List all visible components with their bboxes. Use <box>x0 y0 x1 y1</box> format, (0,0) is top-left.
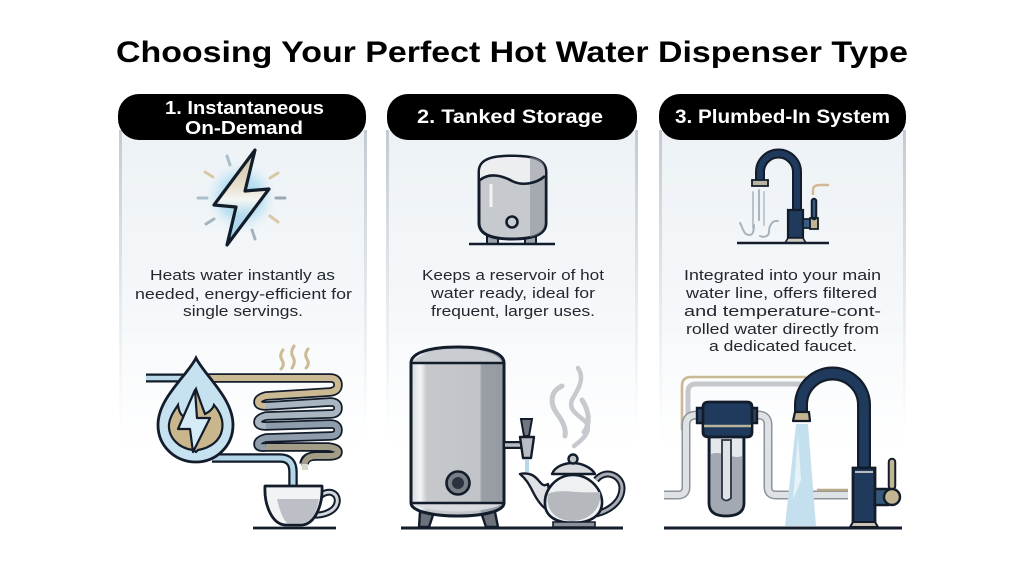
heading pill 2 <box>387 94 637 140</box>
teapot <box>520 454 622 527</box>
filter <box>697 402 757 516</box>
water drop with flame <box>158 358 233 462</box>
description 3 <box>684 267 881 355</box>
heading pill 3: 3. Plumbed-In System <box>675 107 890 128</box>
description 2: frequent, larger uses. <box>431 303 595 320</box>
description 3: water line, offers filtered <box>685 285 877 302</box>
illustration: heating coil, drop and cup <box>146 346 338 528</box>
panel: plumbed-in system <box>659 94 906 530</box>
title: Choosing Your Perfect Hot Water Dispenser Type <box>116 36 908 69</box>
description 1 <box>135 267 352 320</box>
steam <box>281 346 308 369</box>
heading pill 1: On-Demand <box>185 117 303 138</box>
heading pill 2: 2. Tanked Storage <box>417 107 603 128</box>
pipes <box>664 377 848 495</box>
tap <box>505 419 534 472</box>
description 3: rolled water directly from <box>686 321 879 338</box>
outlet pipe <box>212 458 293 486</box>
heading pill 1 <box>118 94 366 140</box>
water stream <box>785 424 816 526</box>
panel: instantaneous on-demand <box>118 94 367 530</box>
illustration: filter and large faucet <box>664 374 902 528</box>
steam <box>552 368 588 446</box>
description 1: needed, energy-efficient for <box>135 286 352 303</box>
icon: small faucet <box>737 154 829 243</box>
description 3: a dedicated faucet. <box>709 338 857 355</box>
description 2: water ready, ideal for <box>430 285 595 302</box>
cup <box>253 486 337 528</box>
coil <box>205 378 338 470</box>
tank legs <box>419 512 498 527</box>
inlet pipe <box>146 374 190 382</box>
heading pill 1: 1. Instantaneous <box>165 97 324 118</box>
description 1: Heats water instantly as <box>150 267 335 284</box>
description 2 <box>422 267 605 320</box>
description 3: and temperature-cont- <box>684 303 881 320</box>
faucet <box>793 374 900 527</box>
description 3: Integrated into your main <box>684 267 881 284</box>
tank body <box>411 347 504 516</box>
icon: small tank <box>469 156 555 244</box>
illustration: large tank and teapot <box>401 347 623 528</box>
heading pill 3 <box>659 94 906 140</box>
description 2: Keeps a reservoir of hot <box>422 267 605 284</box>
icon: lightning bolt <box>198 150 285 245</box>
panel: tanked storage <box>386 94 638 530</box>
description 1: single servings. <box>183 303 303 320</box>
